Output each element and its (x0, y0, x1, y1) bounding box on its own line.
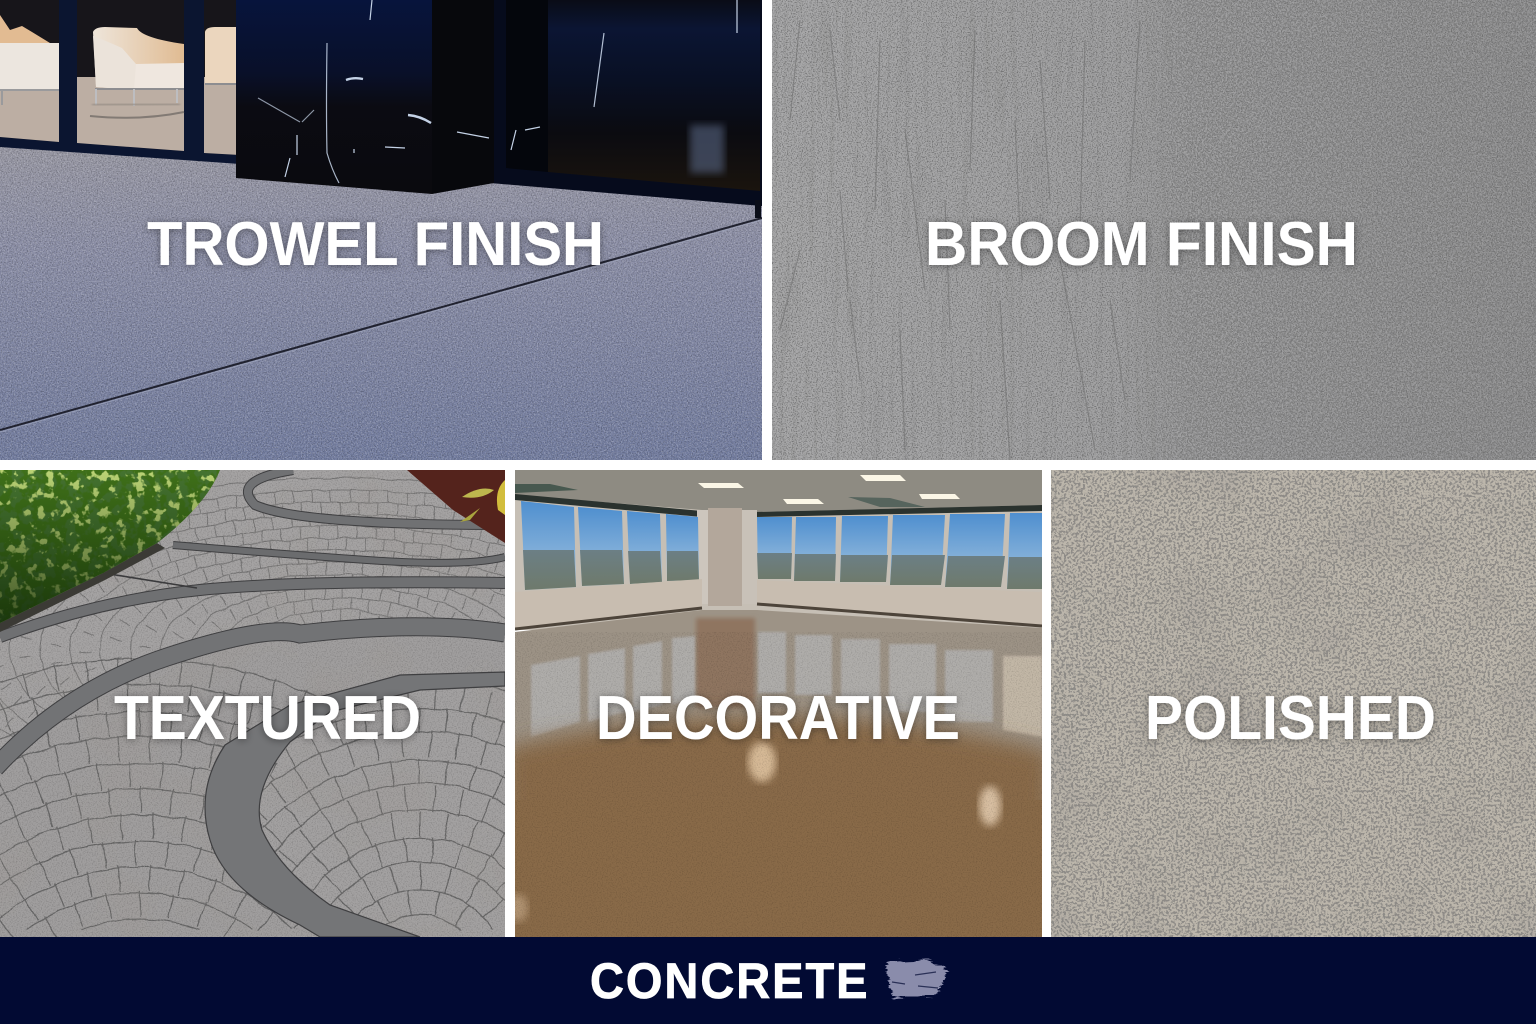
cobbles: lower-right fan (260, 687, 505, 931)
label: trowel finish: TROWEL FINISH (147, 210, 604, 279)
label: polished: POLISHED (1145, 684, 1436, 753)
photo: trowelled concrete ground (0, 130, 762, 460)
panel: polished (1051, 470, 1536, 937)
icon: concrete brush swatch (887, 960, 948, 998)
footer title: CONCRETE (590, 954, 869, 1009)
panel: broom finish (772, 0, 1536, 460)
photo: black marble column (236, 0, 762, 218)
panel: textured (0, 470, 505, 937)
label: broom finish: BROOM FINISH (925, 210, 1358, 279)
photo: office ceiling (515, 470, 1042, 512)
panel: decorative (505, 470, 1050, 937)
decorative bands (0, 470, 505, 768)
label: textured: TEXTURED (114, 684, 421, 753)
photo: broomed concrete texture (772, 0, 1536, 460)
cobbles: lower-left fan (0, 657, 322, 937)
label: decorative: DECORATIVE (596, 684, 960, 753)
cobbles: upper fan (0, 476, 505, 737)
footer band (0, 937, 1536, 1024)
photo: office walls and windows (515, 494, 1042, 630)
panel: trowel finish (0, 0, 762, 460)
photo: glass wall with chairs (0, 0, 240, 164)
photo: speckled concrete texture (1051, 470, 1536, 937)
photo: stamped cobble walkway (0, 470, 505, 937)
photo: green shrubs (0, 470, 505, 632)
photo: polished floor (505, 610, 1050, 937)
